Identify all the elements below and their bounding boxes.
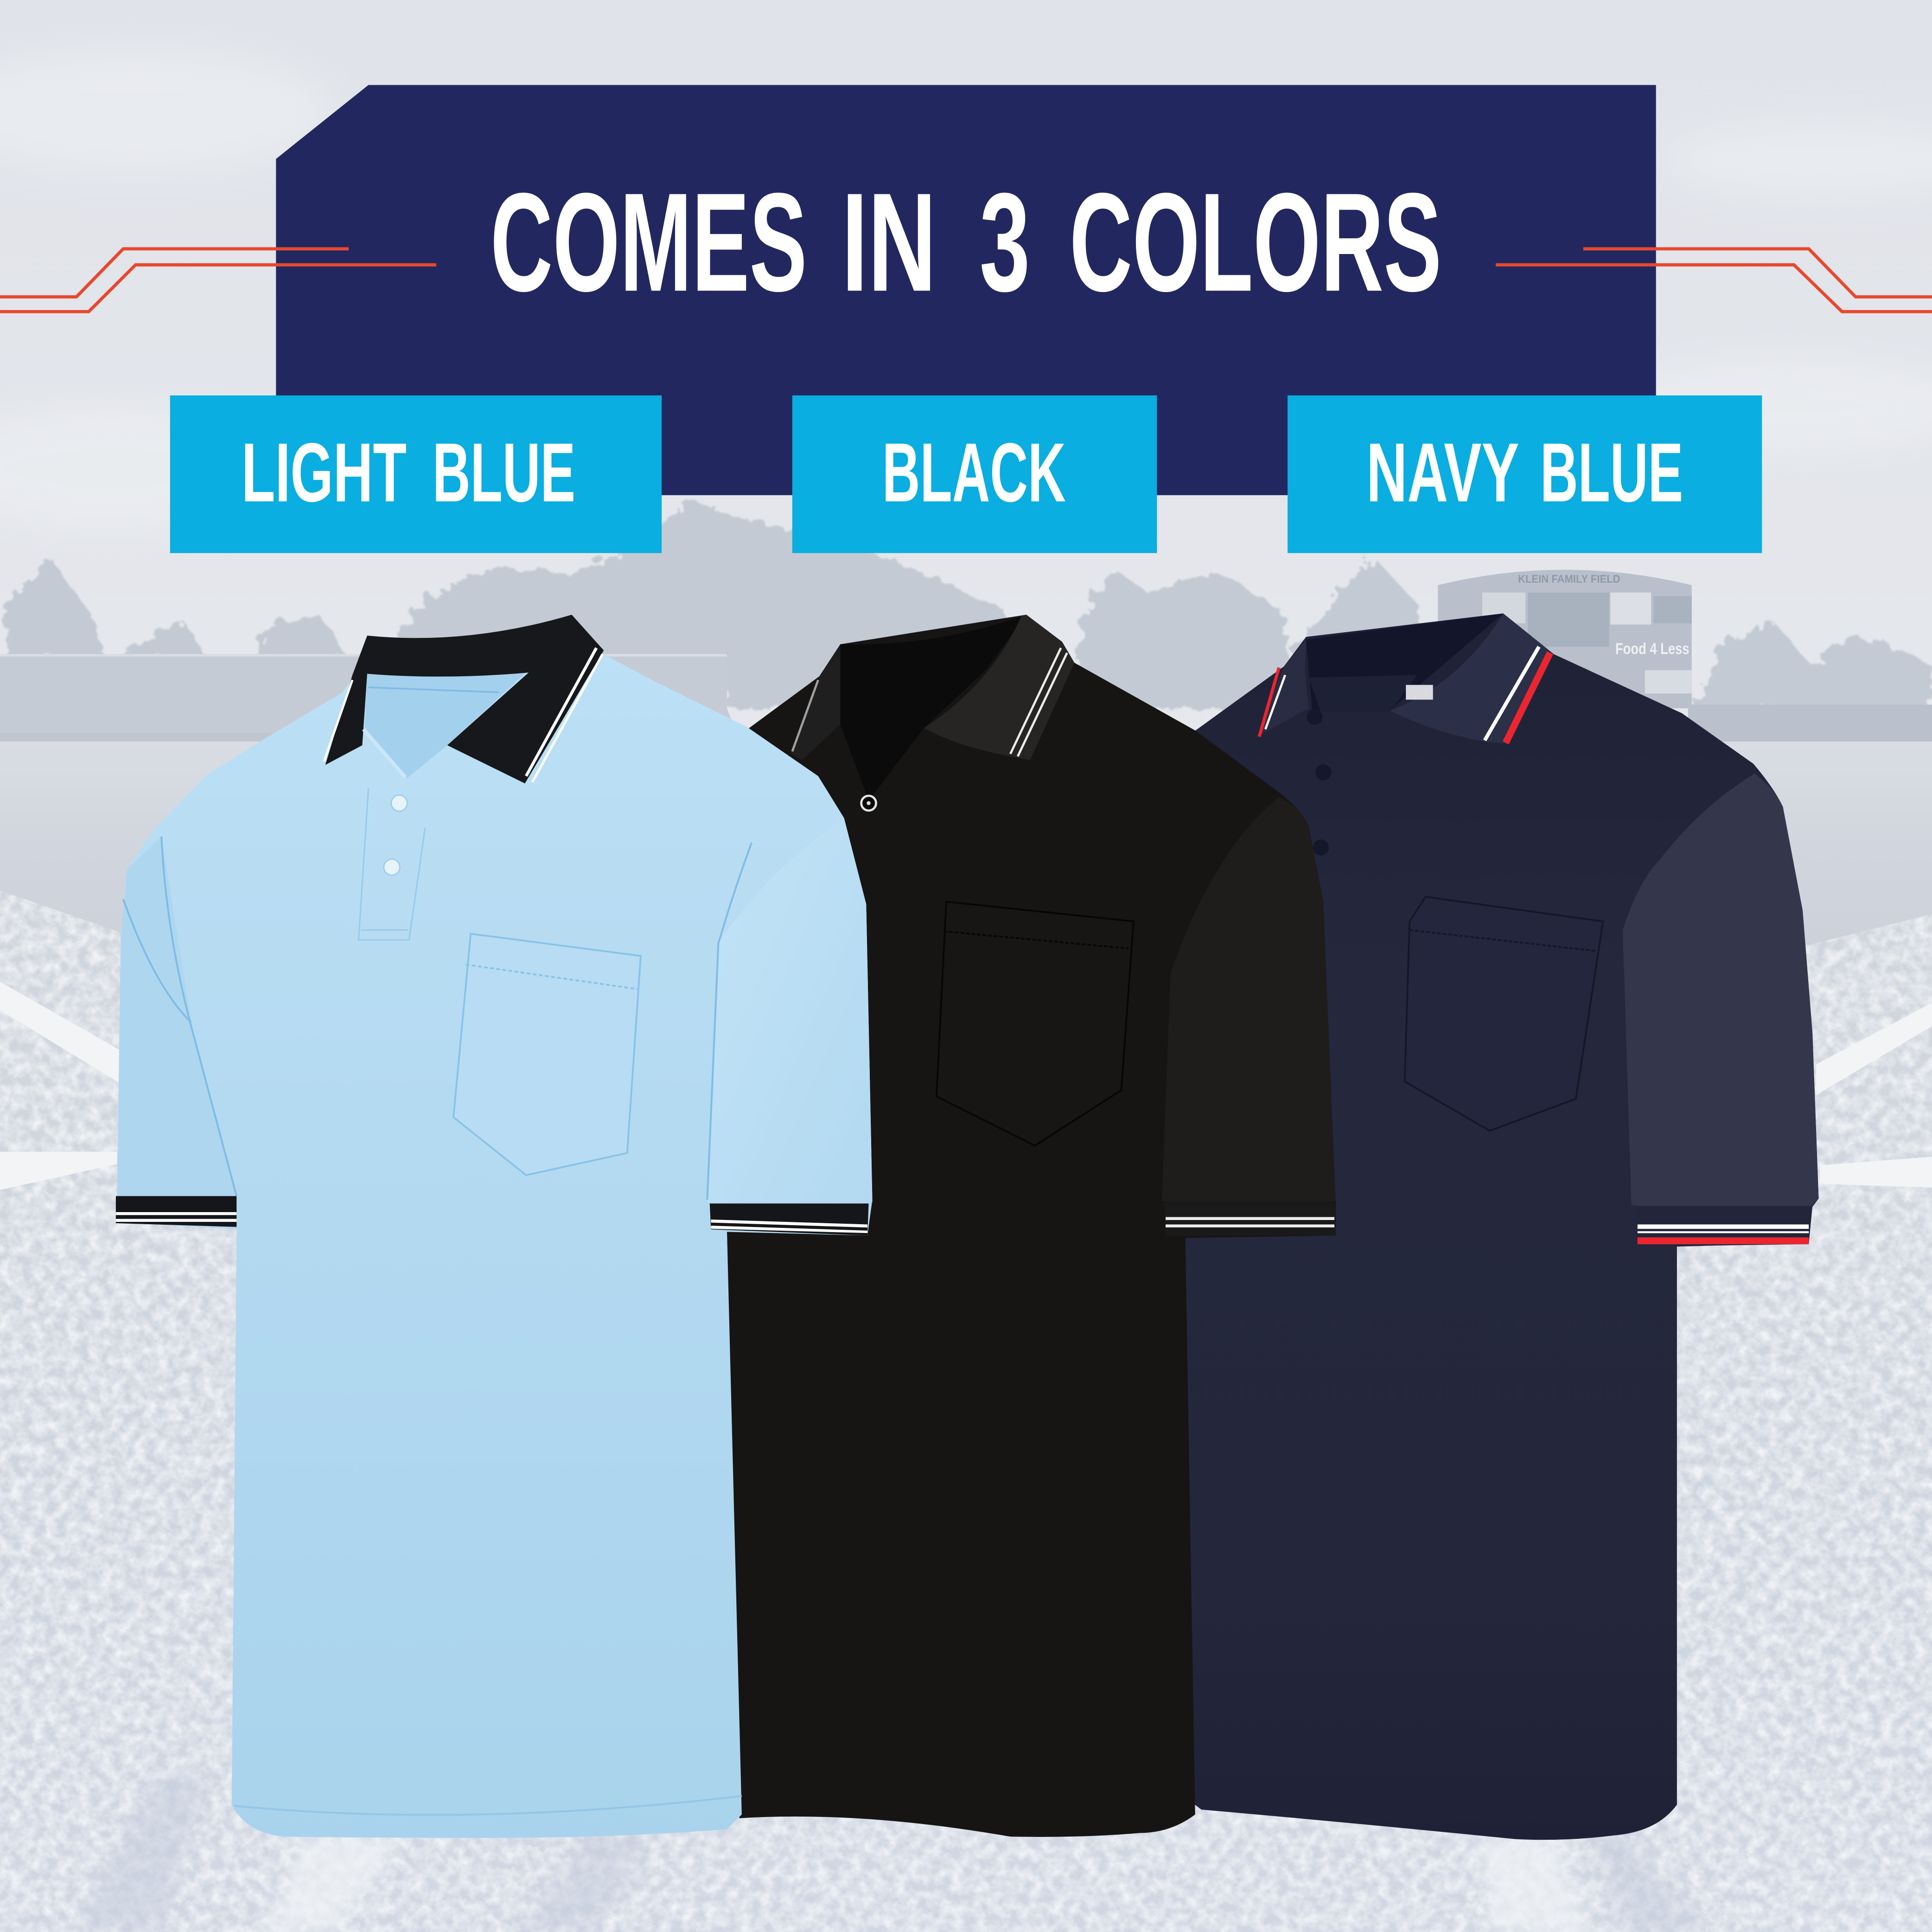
label: light blue: LIGHT: [242, 426, 407, 520]
black body: [727, 615, 1336, 1837]
navy body: [1171, 613, 1818, 1840]
shirt: navy blue: [1171, 613, 1818, 1840]
title banner: [276, 85, 1656, 495]
label: navy blue: NAVY: [1366, 426, 1519, 520]
light blue buttons: [384, 795, 407, 875]
title text: [491, 164, 1441, 321]
light blue cuffs: [116, 1196, 869, 1235]
outfield fence: [0, 654, 740, 742]
label: black: [792, 395, 1157, 553]
label: light blue: BLUE: [433, 426, 575, 520]
navy collar: [1390, 613, 1554, 744]
navy sleeve: [1623, 774, 1818, 1206]
label: navy blue: BLUE: [1540, 426, 1683, 520]
navy pocket: [1405, 897, 1603, 1131]
light blue neck interior: [365, 670, 529, 779]
black neck opening: [840, 615, 1027, 801]
tree line: [6, 499, 1932, 714]
light blue collar: [325, 615, 604, 783]
red circuit lines left: [0, 249, 436, 311]
black button: [861, 796, 876, 811]
light blue left sleeve: [117, 836, 236, 1196]
scoreboard: Food 4 Less: [1615, 640, 1689, 658]
scoreboard: [1438, 570, 1692, 708]
title text: 3: [980, 164, 1030, 321]
light blue pocket: [453, 934, 641, 1175]
label: navy blue: [1288, 395, 1762, 553]
black sleeve: [1162, 797, 1336, 1201]
clouds: [0, 49, 1932, 530]
light blue seams: [123, 836, 752, 1815]
light blue right sleeve: [707, 818, 873, 1202]
shirt: black: [727, 615, 1336, 1837]
infield: [0, 890, 1932, 1932]
title text: IN: [842, 164, 937, 321]
black collar: [924, 615, 1074, 760]
navy cuff: [1635, 1206, 1812, 1246]
background: baseball stadium photo: [0, 499, 1932, 1932]
red circuit lines right: [1496, 249, 1932, 311]
light blue collar stripes: [324, 648, 603, 782]
navy neck opening: [1306, 613, 1503, 711]
foul lines: [0, 982, 1932, 1190]
navy collar stripes: [1259, 647, 1550, 743]
navy tag: [1406, 685, 1433, 699]
title text: COMES: [491, 164, 807, 321]
light blue body: [116, 635, 873, 1838]
faint bottom streaks: [74, 1774, 1707, 1932]
light blue placket: [358, 729, 425, 940]
label: light blue: [170, 395, 662, 553]
title text: COLORS: [1070, 164, 1441, 321]
black collar stripes: [792, 648, 1067, 756]
outfield grass: [0, 742, 1932, 945]
shirt: light blue: [116, 615, 873, 1838]
scoreboard: KLEIN FAMILY FIELD: [1518, 573, 1620, 585]
black cuff: [1164, 1201, 1336, 1235]
label: black: BLACK: [882, 426, 1066, 520]
black pocket: [937, 902, 1134, 1145]
navy buttons: [1307, 709, 1331, 856]
